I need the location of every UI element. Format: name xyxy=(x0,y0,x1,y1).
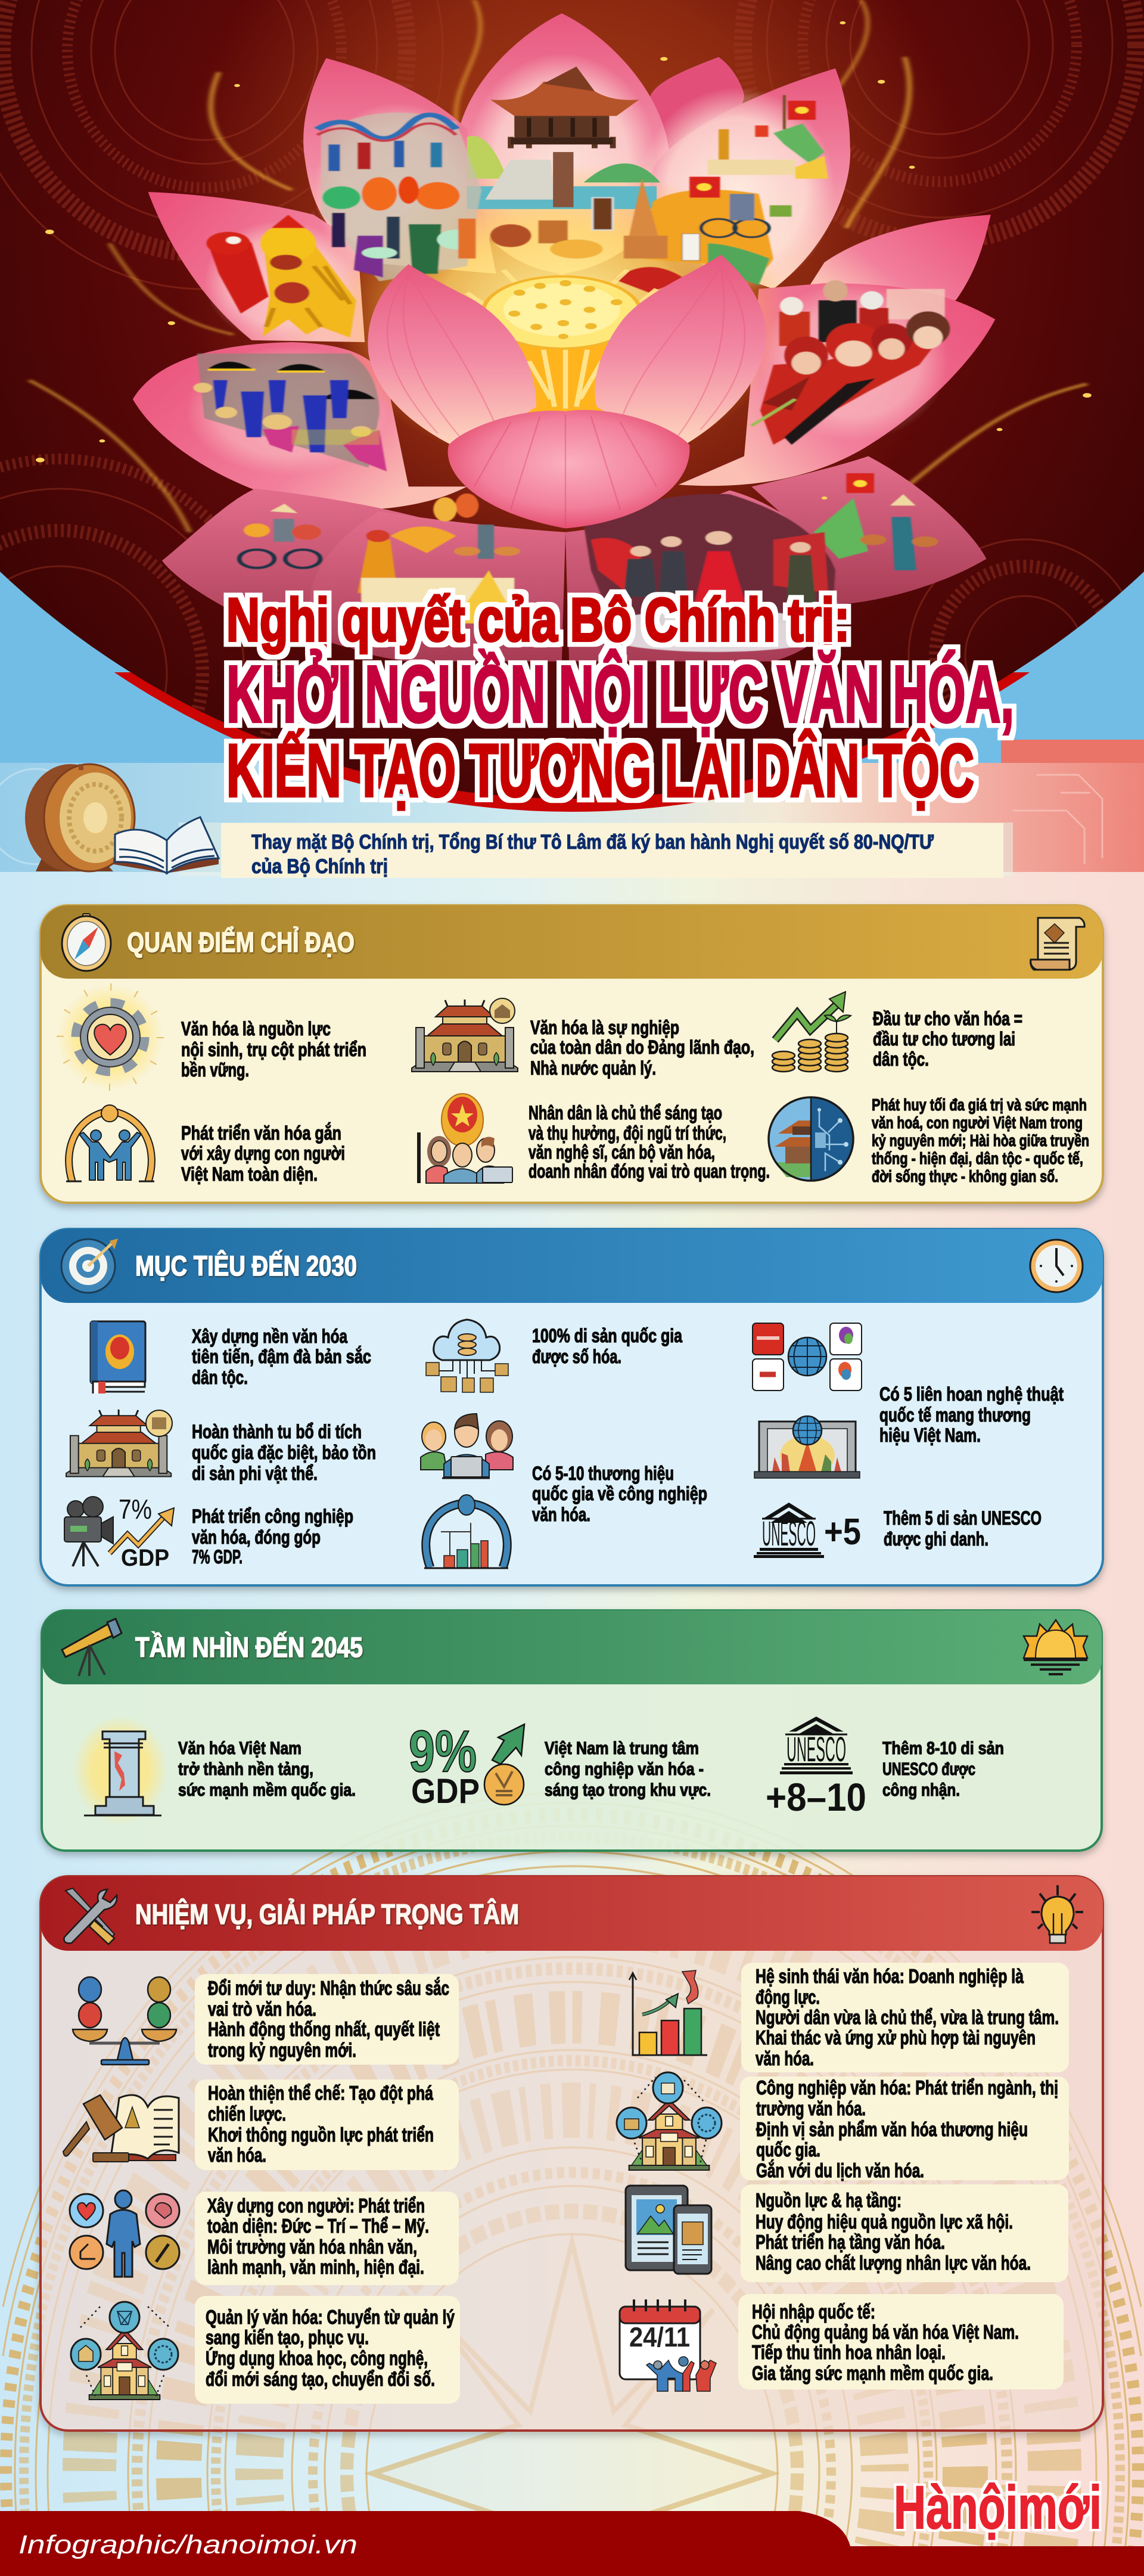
text: thêm 5 di sản: Thêm 5 di sản UNESCO xyxy=(884,1507,1042,1529)
intro box: Thay mặt Bộ Chính trị, Tổng Bí thư Tô Lâm đã ký ban hành Nghị quyết số 80-NQ/TƯ xyxy=(251,831,934,854)
header: Nhiệm vụ, giải pháp trọng tâm: NHIỆM VỤ, GIẢI PHÁP TRỌNG TÂM xyxy=(135,1898,519,1930)
panel: Tầm nhìn đến 2045 xyxy=(42,1610,1102,1851)
text: hoàn thiện thể chế: Hoàn thiện thể chế: Tạo đột phá xyxy=(208,2082,433,2104)
icon: UNESCO +8-10 xyxy=(766,1717,866,1819)
header: Tầm nhìn đến 2045: TẦM NHÌN ĐẾN 2045 xyxy=(135,1631,363,1663)
text: việt nam là trung tâm xyxy=(545,1739,711,1800)
text: nhân dân là chủ thể: Nhân dân là chủ thể sáng tạo xyxy=(529,1102,722,1123)
text boxes xyxy=(195,1963,1069,2404)
icon: UNESCO +8-10: +8–10 xyxy=(766,1775,866,1819)
text: quản lý văn hóa: sang kiến tạo, phục vụ. xyxy=(206,2326,369,2348)
icon: tradition and technology sphere xyxy=(769,1097,853,1181)
icon: temple badge xyxy=(146,1410,172,1436)
petal interiors xyxy=(186,53,949,475)
text: xây dựng con người xyxy=(207,2195,429,2278)
text: hệ sinh thái văn hóa: động lực. xyxy=(756,1986,820,2008)
icon: film camera, 7% GDP xyxy=(64,1494,174,1571)
text: có 5-10 thương hiệu: Có 5-10 thương hiệu xyxy=(532,1463,674,1484)
text: thêm 5 di sản: được ghi danh. xyxy=(884,1528,988,1550)
text: nguồn lực và hạ tầng: Nâng cao chất lượng nhân lực văn hóa. xyxy=(756,2252,1031,2274)
text: văn hóa việt nam: Văn hóa Việt Nam xyxy=(178,1739,301,1758)
intro box: của Bộ Chính trị xyxy=(251,855,388,878)
text: văn hóa là nguồn lực: Văn hóa là nguồn lực xyxy=(181,1018,331,1039)
icon: heritage house network xyxy=(617,2072,722,2170)
sparkles xyxy=(36,21,1092,499)
scene: dancers xyxy=(318,113,481,281)
text: văn hóa là sự nghiệp: của toàn dân do Đảng lãnh đạo, xyxy=(530,1036,754,1058)
icon: growth bar chart xyxy=(629,1970,707,2055)
text: văn hóa việt nam xyxy=(178,1739,356,1800)
text: phát triển công nghiệp xyxy=(192,1506,353,1568)
text: 100% di sản: 100% di sản quốc gia xyxy=(532,1325,682,1346)
text: thêm 8-10 di sản xyxy=(882,1739,1004,1800)
text: quản lý văn hóa xyxy=(206,2306,455,2390)
icon: light bulb xyxy=(1031,1885,1083,1943)
text: có 5-10 thương hiệu: quốc gia về công nghiệp xyxy=(532,1483,707,1504)
text: quản lý văn hóa: đổi mới sáng tạo, chuyển đổi số. xyxy=(206,2368,435,2390)
icon: scroll xyxy=(1031,918,1084,970)
icon: balance scale xyxy=(73,1977,176,2065)
text: văn hóa là sự nghiệp: Văn hóa là sự nghiệp xyxy=(530,1017,679,1038)
text: việt nam là trung tâm: công nghiệp văn hóa - xyxy=(545,1759,704,1779)
text: phát huy tối đa: thống - hiện đại, dân tộc - quốc tế, xyxy=(872,1149,1083,1168)
text: hệ sinh thái văn hóa: Khai thác và ứng xử phù hợp tài nguyên xyxy=(756,2026,1036,2049)
icon: people under arch xyxy=(66,1105,154,1181)
scene: street vendors and landmarks xyxy=(240,473,938,623)
text: văn hóa là nguồn lực: nội sinh, trụ cột phát triển xyxy=(181,1039,366,1060)
scene: heritage collage xyxy=(490,95,828,293)
icon: three people with laptop xyxy=(421,1414,513,1478)
stat: 9% GDP: 9% xyxy=(409,1718,477,1784)
text: có 5-10 thương hiệu xyxy=(532,1463,707,1525)
icon: UNESCO +5: +5 xyxy=(824,1512,861,1553)
panel: Quan điểm chỉ đạo xyxy=(41,905,1103,1203)
hero: red crescent behind the dark circle xyxy=(114,672,1030,812)
text: phát triển công nghiệp: văn hóa, đóng góp xyxy=(192,1526,321,1548)
title: Nghị quyết của Bộ Chính trị: xyxy=(226,586,850,654)
icon: person with four values xyxy=(70,2190,179,2277)
text: việt nam là trung tâm: sáng tạo trong khu vực. xyxy=(545,1780,711,1800)
icon: festival logos around globe xyxy=(753,1323,862,1391)
text: có 5 liên hoan: hiệu Việt Nam. xyxy=(879,1424,981,1446)
text: xây dựng nền văn hóa: tiên tiến, đậm đà bản sắc xyxy=(192,1346,371,1367)
text: công nghiệp văn hóa: quốc gia. xyxy=(756,2139,820,2161)
panel: Nhiệm vụ, giải pháp trọng tâm xyxy=(41,1876,1103,2431)
icon: gear with heart xyxy=(58,985,163,1090)
text: nguồn lực và hạ tầng: Nguồn lực & hạ tầng: xyxy=(756,2189,901,2211)
text: quản lý văn hóa: Ứng dụng khoa học, công nghệ, xyxy=(206,2347,428,2369)
text: công nghiệp văn hóa: Định vị sản phẩm văn hóa thương hiệu xyxy=(756,2118,1028,2140)
text: phát huy tối đa xyxy=(872,1095,1089,1185)
icon: gavel and law book xyxy=(63,2095,179,2162)
text: phát huy tối đa: Phát huy tối đa giá trị và sức mạnh xyxy=(872,1095,1087,1114)
icon: rising sun xyxy=(1024,1620,1087,1674)
pattern: bronze drum mandalas xyxy=(0,0,1144,739)
text: xây dựng con người: lành mạnh, văn minh, hiện đại. xyxy=(207,2256,424,2278)
text: thêm 5 di sản xyxy=(884,1507,1042,1550)
text: hoàn thành tu bổ: Hoàn thành tu bổ di tích xyxy=(192,1421,362,1442)
icon: UNESCO +8-10: UNESCO xyxy=(786,1730,846,1769)
text: văn hóa là sự nghiệp: Nhà nước quản lý. xyxy=(530,1057,656,1079)
lotus back petals xyxy=(133,13,995,662)
header: Tầm nhìn đến 2045 xyxy=(42,1610,1102,1684)
icon: UNESCO +5 xyxy=(754,1503,861,1558)
scene: ethnic women xyxy=(751,280,950,445)
text: xây dựng con người: Môi trường văn hóa nhân văn, xyxy=(207,2236,417,2258)
icon: telescope xyxy=(62,1619,122,1676)
text: công nghiệp văn hóa: Gắn với du lịch văn hóa. xyxy=(756,2159,924,2181)
text: đầu tư cho văn hóa xyxy=(873,1008,1022,1070)
text: nguồn lực và hạ tầng xyxy=(756,2189,1031,2274)
icon: pillar with map xyxy=(73,1715,168,1825)
header: Mục tiêu đến 2030: MỤC TIÊU ĐẾN 2030 xyxy=(135,1250,357,1281)
text: văn hóa việt nam: sức mạnh mềm quốc gia. xyxy=(178,1780,356,1800)
icon: UNESCO +5: UNESCO xyxy=(762,1514,816,1553)
text: văn hóa là sự nghiệp xyxy=(530,1017,754,1079)
icon: temple xyxy=(66,1410,171,1476)
text: có 5 liên hoan: Có 5 liên hoan nghệ thuật xyxy=(879,1383,1064,1405)
text: công nghiệp văn hóa: trường văn hóa. xyxy=(756,2097,866,2119)
header: Nhiệm vụ, giải pháp trọng tâm xyxy=(41,1876,1103,1951)
icon: temple xyxy=(412,1000,518,1072)
text: phát triển công nghiệp: Phát triển công nghiệp xyxy=(192,1506,353,1527)
text: hệ sinh thái văn hóa: văn hóa. xyxy=(756,2047,814,2069)
scene: lion dancers xyxy=(207,215,356,337)
text: văn hóa việt nam: trở thành nền tảng, xyxy=(178,1759,313,1779)
text: hội nhập quốc tế xyxy=(752,2301,1019,2384)
text: văn hóa là nguồn lực xyxy=(181,1018,366,1081)
text: đổi mới tư duy: vai trò văn hóa. xyxy=(208,1998,316,2020)
icon: open book xyxy=(113,817,219,873)
text: xây dựng con người: Xây dựng con người: Phát triển xyxy=(207,2195,425,2217)
text: đầu tư cho văn hóa: Đầu tư cho văn hóa = xyxy=(873,1008,1022,1029)
gold swirls back xyxy=(29,0,1087,532)
text: xây dựng nền văn hóa xyxy=(192,1326,371,1388)
icon: badge xyxy=(490,998,515,1023)
text: hoàn thành tu bổ: quốc gia đặc biệt, bảo tồn xyxy=(192,1442,376,1463)
text: 100% di sản xyxy=(532,1325,682,1367)
text: hoàn thành tu bổ xyxy=(192,1421,376,1484)
stat: 9% GDP: GDP xyxy=(411,1772,480,1811)
icon: tablet and phone xyxy=(626,2186,711,2274)
icon: calendar 24/11 xyxy=(620,2299,716,2391)
header: Quan điểm chỉ đạo: QUAN ĐIỂM CHỈ ĐẠO xyxy=(127,926,355,958)
text: hội nhập quốc tế: Tiếp thu tinh hoa nhân loại. xyxy=(752,2341,946,2363)
icon: coins and growth arrow xyxy=(772,992,851,1072)
text: hoàn thiện thể chế: văn hóa. xyxy=(208,2144,266,2166)
text: văn hóa là nguồn lực: bền vững. xyxy=(181,1059,249,1081)
text: 100% di sản: được số hóa. xyxy=(532,1346,621,1367)
icon: bronze drum xyxy=(25,764,135,871)
hero artwork: lotus on dark red background xyxy=(0,0,1144,799)
scene: One Pillar Pagoda xyxy=(467,67,660,209)
text: nhân dân là chủ thể xyxy=(529,1102,770,1182)
intro box xyxy=(221,823,1003,878)
scene: stage performers xyxy=(584,494,839,652)
text: xây dựng con người: toàn diện: Đức – Trí – Thể – Mỹ. xyxy=(207,2215,429,2237)
lotus inner petals, pod and stamens xyxy=(368,255,766,529)
text: đổi mới tư duy: Đổi mới tư duy: Nhận thức sâu sắc xyxy=(208,1977,449,1999)
header: Quan điểm chỉ đạo xyxy=(41,905,1103,979)
text: phát triển công nghiệp: 7% GDP. xyxy=(192,1546,243,1568)
icon: clock xyxy=(1030,1240,1083,1292)
stat: 9% GDP xyxy=(409,1718,524,1811)
scene: quan ho performers xyxy=(193,353,387,471)
text: hội nhập quốc tế: Chủ động quảng bá văn hóa Việt Nam. xyxy=(752,2321,1019,2343)
text: có 5 liên hoan xyxy=(879,1383,1064,1446)
text: nhân dân là chủ thể: doanh nhân đóng vai trò quan trọng. xyxy=(529,1160,770,1182)
text: đổi mới tư duy xyxy=(208,1977,449,2061)
text: hội nhập quốc tế: Gia tăng sức mạnh mềm quốc gia. xyxy=(752,2362,993,2384)
footer bar xyxy=(0,2511,1144,2576)
text: đổi mới tư duy: trong kỷ nguyên mới. xyxy=(208,2039,356,2061)
icon: wrench and screwdriver xyxy=(64,1888,117,1944)
icon: film camera, 7% GDP: 7% xyxy=(119,1494,152,1525)
text: phát huy tối đa: văn hoá, con người Việt Nam trong xyxy=(872,1113,1083,1132)
text: công nghiệp văn hóa xyxy=(756,2077,1058,2181)
text: nhân dân là chủ thể: và thụ hưởng, đội ngũ trí thức, xyxy=(529,1122,726,1144)
text: đầu tư cho văn hóa: đầu tư cho tương lai xyxy=(873,1028,1015,1050)
text: xây dựng nền văn hóa: Xây dựng nền văn hóa xyxy=(192,1326,347,1347)
text: đổi mới tư duy: Hành động thống nhất, quyết liệt xyxy=(208,2018,440,2040)
text: nguồn lực và hạ tầng: Phát triển hạ tầng văn hóa. xyxy=(756,2231,945,2253)
text: phát huy tối đa: đời sống thực - không gian số. xyxy=(872,1167,1058,1185)
pattern: circuit lines on band xyxy=(0,769,1102,864)
text: thêm 8-10 di sản: Thêm 8-10 di sản xyxy=(882,1739,1004,1758)
text: hoàn thành tu bổ: di sản phi vật thể. xyxy=(192,1463,318,1484)
text: nguồn lực và hạ tầng: Huy động hiệu quả nguồn lực xã hội. xyxy=(756,2211,1013,2233)
text: hoàn thiện thể chế: Khơi thông nguồn lực phát triển xyxy=(208,2124,434,2146)
icon: compass xyxy=(62,914,111,971)
text: hoàn thiện thể chế: chiến lược. xyxy=(208,2103,286,2125)
icon: arch with bar chart xyxy=(424,1495,508,1568)
text: hệ sinh thái văn hóa xyxy=(756,1965,1059,2069)
text: phát triển văn hóa gắn: với xây dựng con người xyxy=(181,1143,345,1164)
text: thêm 8-10 di sản: công nhận. xyxy=(882,1780,960,1800)
text: phát triển văn hóa gắn xyxy=(181,1122,345,1185)
header: Mục tiêu đến 2030 xyxy=(41,1229,1103,1303)
text: việt nam là trung tâm: Việt Nam là trung tâm xyxy=(545,1739,699,1758)
panel: Mục tiêu đến 2030 xyxy=(41,1229,1103,1585)
text: hội nhập quốc tế: Hội nhập quốc tế: xyxy=(752,2301,875,2323)
footer bar: Infographic/hanoimoi.vn xyxy=(18,2530,358,2559)
icon: target with arrow xyxy=(61,1239,118,1293)
text: nhân dân là chủ thể: văn nghệ sĩ, cán bộ văn hóa, xyxy=(529,1141,715,1163)
icon: house with culture and tech xyxy=(71,2302,178,2400)
text: phát triển văn hóa gắn: Việt Nam toàn diện. xyxy=(181,1163,318,1185)
icon: cloud database xyxy=(426,1320,508,1392)
text: có 5-10 thương hiệu: văn hóa. xyxy=(532,1504,590,1525)
icon: calendar 24/11: 24/11 xyxy=(629,2321,690,2352)
background: bronze drum pattern xyxy=(3,1793,1141,2556)
text: xây dựng nền văn hóa: dân tộc. xyxy=(192,1367,248,1388)
text: thêm 8-10 di sản: UNESCO được xyxy=(882,1759,975,1779)
text: hoàn thiện thể chế xyxy=(208,2082,434,2166)
icon: stage with globe xyxy=(754,1416,860,1478)
text: đầu tư cho văn hóa: dân tộc. xyxy=(873,1048,929,1070)
text: phát triển văn hóa gắn: Phát triển văn hóa gắn xyxy=(181,1122,341,1144)
icon: blue law book xyxy=(91,1321,145,1393)
icon: film camera, 7% GDP: GDP xyxy=(121,1545,169,1571)
title xyxy=(226,586,1014,812)
icon: emblem with people xyxy=(419,1094,512,1183)
text: có 5 liên hoan: quốc tế mang thương xyxy=(879,1404,1031,1426)
text: hệ sinh thái văn hóa: Hệ sinh thái văn hóa: Doanh nghiệp là xyxy=(756,1965,1024,1987)
text: quản lý văn hóa: Quản lý văn hóa: Chuyển từ quản lý xyxy=(206,2306,455,2328)
